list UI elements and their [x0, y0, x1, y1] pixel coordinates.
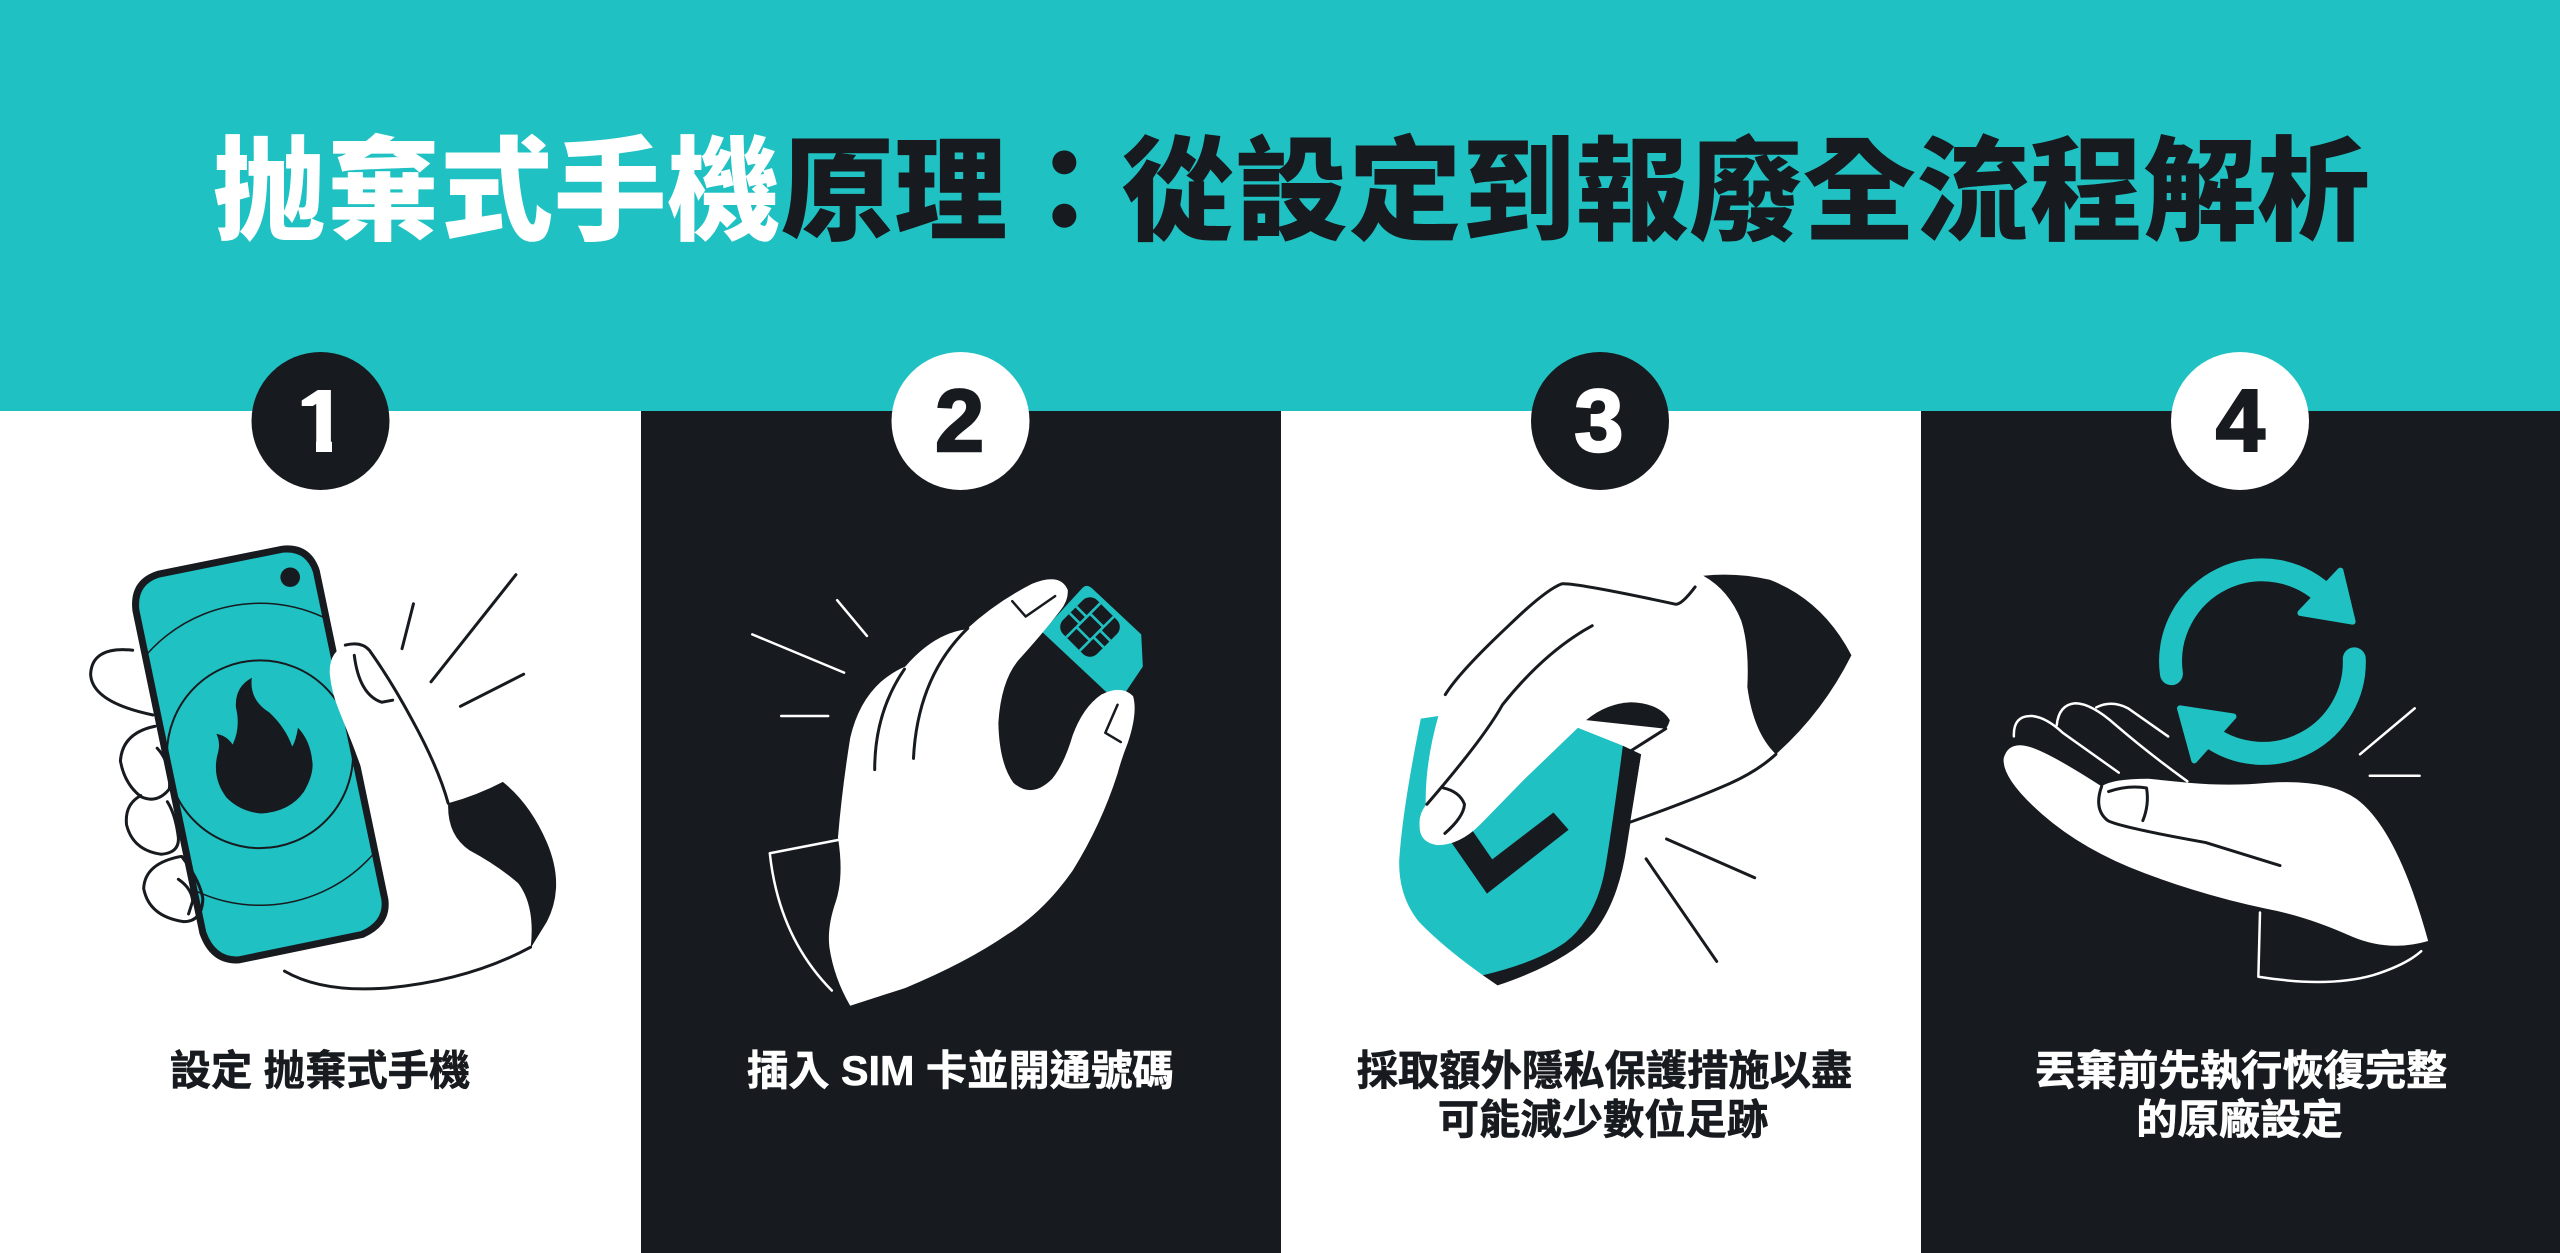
icon: reset arrows — [2171, 570, 2354, 760]
motion rays — [2360, 708, 2420, 776]
step 3 number badge: 3 — [1574, 371, 1623, 470]
middle finger — [120, 726, 170, 799]
hand — [2004, 745, 2428, 946]
thumb nail — [2109, 787, 2147, 821]
thumb outline — [345, 644, 448, 803]
ring finger — [126, 796, 178, 854]
motion rays — [402, 575, 524, 706]
caption 3: 採取額外隱私保護措施以盡 — [1357, 1048, 1852, 1094]
sleeve — [448, 782, 556, 948]
motion rays — [1646, 839, 1755, 961]
SIM chip — [1056, 593, 1124, 661]
step 4 number badge: 4 — [2216, 371, 2265, 470]
panel: step 1 set up phone — [89, 352, 556, 1090]
check mark — [1451, 812, 1569, 894]
panel: step 2 insert SIM — [641, 352, 1281, 1253]
step 3 number badge — [1531, 352, 1669, 490]
step 4 number badge — [2171, 352, 2309, 490]
finger nails — [1012, 596, 1121, 742]
step 1 number badge — [252, 352, 390, 490]
index finger — [91, 650, 153, 715]
hand lines — [1427, 584, 1776, 822]
shield — [1399, 716, 1623, 975]
sleeve outline — [2258, 912, 2421, 982]
phone signal rings — [148, 602, 372, 906]
phone body — [136, 549, 385, 960]
shield shadow — [1483, 746, 1641, 985]
step 1 number badge: 1 — [297, 372, 346, 471]
motion rays — [752, 600, 867, 716]
curled fingers — [2014, 703, 2187, 781]
illustration: hand holding phone with flame — [91, 549, 556, 989]
step 2 number badge — [892, 352, 1030, 490]
gap under hand — [1586, 702, 1670, 729]
thumb — [330, 644, 449, 805]
step 2 number badge: 2 — [935, 371, 984, 470]
caption 4: 丟棄前先執行恢復完整 — [2035, 1048, 2447, 1094]
hand and lines — [752, 579, 1135, 1006]
panel: step 3 privacy protection — [1281, 352, 1921, 1253]
thumb nail — [354, 655, 393, 702]
panel: step 4 factory reset — [1921, 352, 2560, 1253]
caption 1: 設定 抛棄式手機 — [170, 1048, 470, 1094]
phone camera — [280, 568, 300, 587]
caption 2: 插入 SIM 卡並開通號碼 — [747, 1048, 1174, 1094]
sleeve outline — [770, 840, 838, 991]
finger creases — [875, 628, 968, 770]
illustration: fingers holding SIM card — [752, 579, 1143, 1006]
thumb line — [2099, 786, 2280, 866]
hand — [829, 579, 1135, 1006]
finger nail — [1443, 788, 1464, 833]
icon: flame — [216, 678, 313, 813]
little finger nail — [178, 879, 193, 914]
title: 抛棄式手機原理：從設定到報廢全流程解析 — [213, 100, 2370, 264]
hand — [1420, 570, 1729, 845]
palm line — [284, 947, 531, 989]
sleeve — [1703, 575, 1851, 754]
illustration: open hand with reset arrows — [2004, 570, 2428, 982]
little finger — [144, 856, 203, 922]
caption 4: 的原廠設定 — [2136, 1097, 2343, 1143]
SIM card — [1042, 586, 1143, 693]
illustration: hand holding shield — [1399, 570, 1851, 985]
caption 3: 可能減少數位足跡 — [1438, 1097, 1768, 1143]
header band — [0, 0, 2560, 411]
